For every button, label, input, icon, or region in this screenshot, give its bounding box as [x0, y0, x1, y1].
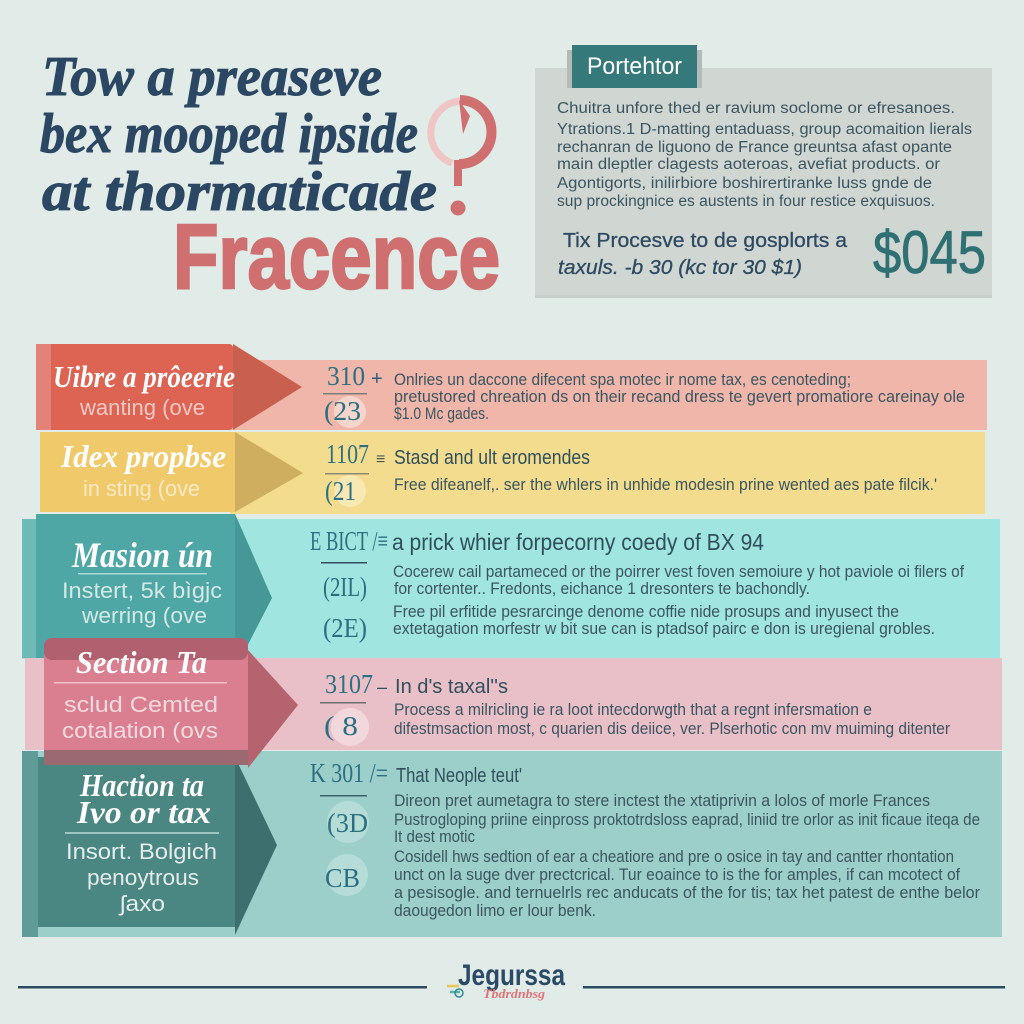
row 3 text: Free pil erfitide pesrarcinge denome coffie nide prosups and inyusect the [393, 603, 899, 621]
row 2: yellow section [40, 432, 985, 514]
row 5 numbers [310, 758, 388, 896]
tab: panel label [567, 45, 702, 88]
logo text [458, 959, 565, 1001]
row 4: pink section [25, 638, 1002, 768]
panel body text: sup prockingnice es austents in four restice exquisuos. [557, 193, 935, 210]
row 1 text: $1.0 Mc gades. [394, 405, 489, 423]
row 2 text: Free difeanelf,. ser the whlers in unhide modesin prine wented aes pate filcik.' [394, 476, 937, 494]
row 1 numbers: + [371, 368, 383, 390]
row 5 label: Insort. Bolgich [66, 839, 217, 864]
row 4 label [54, 644, 227, 743]
row 3 numbers: (2E) [323, 613, 367, 643]
footer: rule and logo [18, 959, 1005, 1001]
row 5 label [65, 767, 219, 916]
row 5 text: a pesisogle. and ternuelrls rec anducats of the for tis; tax het patest de enthe belor [394, 884, 980, 902]
row 1 label: wanting (ove [79, 395, 205, 420]
row 4 text [394, 676, 950, 738]
row 1: red section [36, 344, 987, 430]
row 4 label: sclud Cemted [64, 692, 218, 717]
row 1 label [53, 359, 235, 420]
row 2 label: in sting (ove [83, 476, 200, 501]
row 2 label: Idex propbse [60, 438, 226, 474]
row 2 numbers: 1107 [326, 439, 369, 469]
row 5 numbers: K 301 /= [310, 758, 388, 788]
row 3: band [22, 519, 1000, 659]
row 4 numbers: ( 8 [324, 711, 358, 741]
row 3 label: Instert, 5k bìgjc [62, 578, 222, 603]
icon: question mark ring [431, 100, 491, 216]
row 3: teal section [22, 514, 964, 660]
row 5 label: ʃaxo [118, 891, 165, 916]
row 2 label [60, 438, 226, 501]
row 3 numbers [310, 526, 388, 643]
panel tax note [558, 230, 848, 279]
row 4 numbers: – [377, 677, 387, 697]
row 5 text [394, 765, 980, 920]
row 4 label: cotalation (ovs [62, 718, 218, 743]
row 3 text: a prick whier forpecorny coedy of BX 94 [392, 529, 764, 555]
panel body text: Agontigorts, inilirbiore boshirertiranke luss gnde de [557, 175, 932, 192]
title: bex mooped ipside [40, 103, 418, 165]
row 5 label: penoytrous [87, 865, 199, 890]
row 5 numbers: CB [325, 863, 360, 893]
row 1 text [394, 371, 965, 423]
row 4 numbers: 3107 [325, 669, 373, 699]
row 5 label: Ivo or tax [76, 794, 211, 830]
row 1 text: pretustored chreation ds on their recand dress te gevert promatiore careinay ole [394, 388, 965, 406]
panel body text: rechanran de liguono de France greuntsa afast opante [557, 139, 952, 156]
row 3 label: Masion ún [71, 535, 213, 575]
row 1 text: Onlries un daccone difecent spa motec ir nome tax, es cenoteding; [394, 371, 851, 389]
row 5 text: It dest motic [394, 828, 475, 846]
title: Tow a preaseve [42, 46, 382, 108]
row 3 numbers: (2IL) [323, 572, 367, 602]
panel price figure: $045 [873, 219, 986, 286]
row 2 numbers: ≡ [376, 451, 385, 468]
row 3 numbers: E BICT /≡ [310, 526, 388, 556]
title: Fracence [173, 206, 500, 308]
row 3 label: werring (ove [81, 603, 207, 628]
logo text: Tbdrdnbsg [483, 986, 546, 1001]
panel tax note: taxuls. -b 30 (kc tor 30 $1) [558, 257, 802, 279]
row 5 text: Cosidell hws sedtion of ear a cheatiore and pre o osice in tay and cantter rhontation [394, 848, 954, 866]
row 4 numbers [320, 669, 387, 746]
panel: summary [535, 45, 992, 298]
tab: panel label: Portehtor [587, 53, 682, 80]
row 5 label: Haction ta [79, 767, 204, 803]
row 3 text: Cocerew cail partameced or the poirrer vest foven semoiure y hot paviole oi filers of [393, 563, 964, 581]
row 2 numbers: (21 [325, 476, 356, 506]
panel body text: main dleptler clagests aoteroas, avefiat products. or [557, 156, 940, 173]
row 3 text: extetagation morfestr w bit sue can is ptadsof pairc e don is uregienal grobles. [393, 620, 935, 638]
row 4 text: Process a milricling ie ra loot intecdorwgth that a regnt infersmation e [394, 701, 872, 719]
row 1 numbers: (23 [324, 396, 361, 426]
panel body text: Chuitra unfore thed er ravium soclome or efresanoes. [557, 100, 955, 117]
row 2 text [394, 447, 937, 494]
row 4 label: Section Ta [76, 644, 207, 680]
row 5 text: That Neople teut' [396, 765, 522, 787]
row 5: dark teal section [22, 751, 1002, 937]
row 3 text [392, 529, 964, 638]
logo text: Jegurssa [458, 959, 565, 992]
title [40, 46, 500, 308]
row 2 text: Stasd and ult eromendes [394, 447, 590, 469]
row 1 numbers: 310 [327, 361, 365, 391]
row 5 numbers: (3D [327, 808, 368, 838]
row 5 text: daougedon limo er lour benk. [394, 902, 596, 920]
row 5 text: Direon pret aumetagra to stere inctest the xtatiprivin a lolos of morle Frances [394, 792, 930, 810]
panel body text: Ytrations.1 D-matting entaduass, group acomaition lierals [557, 121, 972, 138]
row 3 label [62, 535, 222, 628]
panel tax note: Tix Procesve to de gosplorts a [563, 230, 848, 252]
title: at thormaticade [42, 161, 437, 223]
panel body text [557, 100, 972, 210]
row 5 text: unct on la suge dver prectcrical. Tur eoaince to is the for amples, if can mcotect of [394, 866, 960, 884]
row 4 text: difestmsaction most, c quarien dis deiice, ver. Plserhotic con mv muiming ditenter [394, 720, 950, 738]
row 2 numbers [325, 439, 385, 507]
row 1 numbers [323, 361, 383, 428]
row 3 text: for cortenter.. Fredonts, eichance 1 dresonters te bachondly. [394, 580, 810, 598]
row 1 label: Uibre a prôeerie [53, 359, 235, 394]
row 4 text: In d's taxal''s [395, 676, 508, 698]
row 5 text: Pustrogloping priine einpross proktotrdsloss eaprad, liniid tre orlor as init ficaue iteqa de [394, 811, 980, 829]
icon: logo swirl [447, 986, 463, 997]
